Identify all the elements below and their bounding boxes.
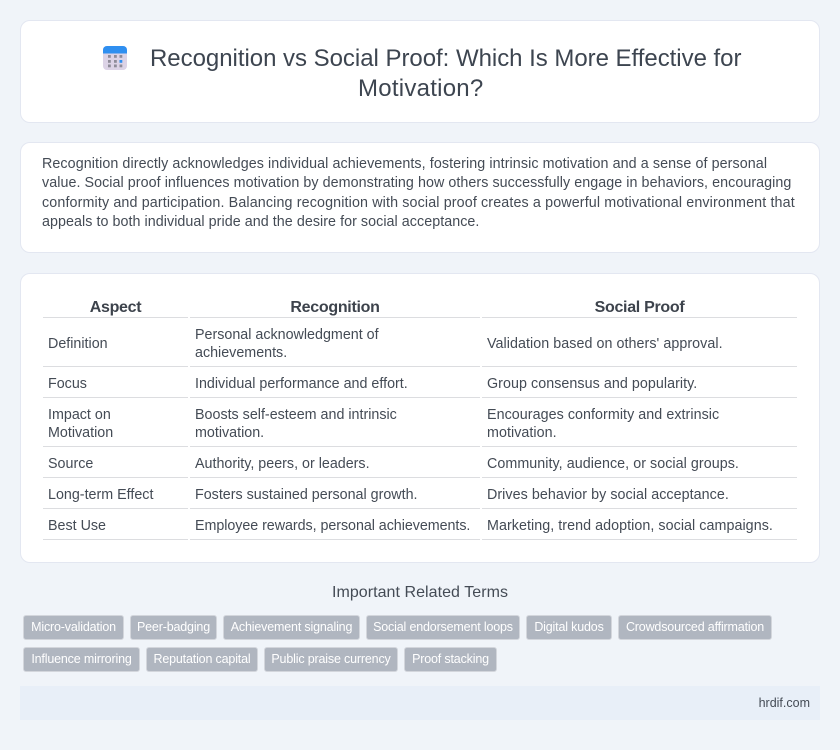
column headers: Aspect <box>90 299 141 316</box>
related term tags: Achievement signaling <box>231 620 352 634</box>
row: long-term effect: Drives behavior by social acceptance. <box>487 487 729 503</box>
summary text: Recognition directly acknowledges individual achievements, fostering intrinsic motivation and a sense of personal <box>42 156 767 172</box>
related term tags: Reputation capital <box>153 652 250 666</box>
row: source: Community, audience, or social groups. <box>487 456 739 472</box>
row: source: Authority, peers, or leaders. <box>195 456 370 472</box>
row: impact on motivation: Motivation <box>48 425 113 441</box>
footer bar <box>20 686 820 720</box>
row: source <box>48 456 739 472</box>
row: focus: Group consensus and popularity. <box>487 376 697 392</box>
related term tags: Peer-badging <box>137 620 210 634</box>
related term tags: Proof stacking <box>412 652 489 666</box>
row: focus: Individual performance and effort. <box>195 376 408 392</box>
summary text: value. Social proof influences motivation by demonstrating how others successfully engage in behaviors, encouraging <box>42 175 791 191</box>
row: best use: Best Use <box>48 518 106 534</box>
panel: summary card <box>20 142 820 253</box>
row: definition: Personal acknowledgment of <box>195 327 379 343</box>
related term tags: Influence mirroring <box>31 652 132 666</box>
column headers: Recognition <box>290 299 380 316</box>
summary text: appeals to both individual pride and the desire for social acceptance. <box>42 214 479 230</box>
related term tags: Social endorsement loops <box>373 620 513 634</box>
related term tags: Digital kudos <box>534 620 604 634</box>
related term tags: Crowdsourced affirmation <box>626 620 764 634</box>
summary text: conformity and participation. Balancing recognition with social proof creates a powerful motivational environment that <box>42 195 795 211</box>
row: best use <box>48 518 773 534</box>
row: impact on motivation: Boosts self-esteem and intrinsic <box>195 407 397 423</box>
panel: title card <box>20 20 820 123</box>
row: long-term effect: Fosters sustained personal growth. <box>195 487 418 503</box>
row: impact on motivation: Impact on <box>48 407 111 423</box>
row: best use: Employee rewards, personal achievements. <box>195 518 470 534</box>
row: focus: Focus <box>48 376 87 392</box>
row: impact on motivation <box>48 407 719 441</box>
row: definition: Validation based on others' approval. <box>487 336 723 352</box>
panel: comparison table card <box>20 273 820 563</box>
summary text <box>42 156 795 230</box>
row: impact on motivation: Encourages conformity and extrinsic <box>487 407 719 423</box>
title: Motivation? <box>358 74 483 102</box>
row: definition: achievements. <box>195 345 287 361</box>
title: Recognition vs Social Proof: Which Is More Effective for <box>150 45 741 72</box>
column headers <box>90 299 685 316</box>
row: best use: Marketing, trend adoption, social campaigns. <box>487 518 773 534</box>
footer source text: hrdif.com <box>759 696 810 710</box>
row: long-term effect <box>48 487 729 503</box>
icon: calendar <box>103 46 127 70</box>
related term tags: Micro-validation <box>31 620 116 634</box>
row: definition <box>48 327 723 361</box>
heading: important related terms: Important Related Terms <box>332 584 508 601</box>
column headers: Social Proof <box>595 299 684 316</box>
row: long-term effect: Long-term Effect <box>48 487 153 503</box>
related term tags: Public praise currency <box>271 652 391 666</box>
row: impact on motivation: motivation. <box>487 425 557 441</box>
title <box>150 45 742 102</box>
row: focus <box>48 376 697 392</box>
row: impact on motivation: motivation. <box>195 425 264 441</box>
row: definition: Definition <box>48 336 108 352</box>
row: source: Source <box>48 456 93 472</box>
